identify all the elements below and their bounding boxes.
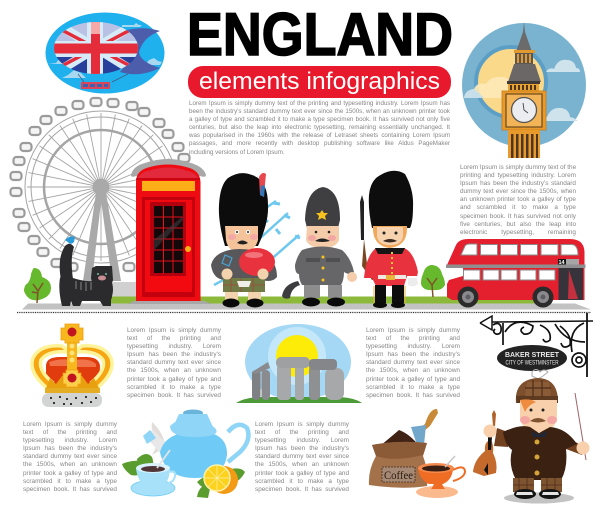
text block: coffee left: standard dummy text ever since	[255, 453, 349, 460]
text block: right of big ben: Lorem Ipsum is simply dummy text of the	[460, 164, 576, 171]
text block: crown: printer took a galley of type and	[127, 376, 221, 383]
capsules	[10, 98, 190, 271]
text block: right of big ben: Ipsum has been the industry's standard	[460, 180, 576, 187]
text block: crown: typesetting industry. Lorem	[127, 343, 221, 350]
icon: teapot and teacup	[122, 410, 248, 498]
text block: stonehenge: specimen book. It has survived	[366, 392, 460, 399]
title: ENGLAND	[187, 1, 453, 68]
text block: tea left: text of the printing and	[23, 429, 117, 436]
text block: right of big ben: electronic typesetting, remaining	[460, 229, 576, 236]
upper windows	[461, 244, 578, 255]
text block: crown: text of the printing and	[127, 335, 221, 342]
text block: tea left: Ipsum has been the industry's	[23, 445, 117, 452]
text block: tea left: specimen book. It has survived	[23, 486, 117, 493]
text block: tea left: typesetting industry. Lorem	[23, 437, 117, 444]
lower windows	[464, 270, 555, 280]
text block: intro paragraph: a galley of type and scrambled it to make a type specimen book. It has survived not only five	[189, 116, 450, 123]
icon: big ben	[462, 22, 586, 158]
text block: right of big ben: printing and typesetting industry. Lorem	[460, 172, 576, 179]
text block: intro paragraph: including versions of Lorem Ipsum.	[189, 149, 285, 156]
text block: crown: Ipsum has been the industry's	[127, 351, 221, 358]
icon: baker street sign	[480, 313, 593, 377]
text block: coffee left: text of the printing and	[255, 429, 349, 436]
text block: crown: scrambled it to make a type	[127, 384, 221, 391]
icon: stonehenge	[236, 324, 362, 403]
icon: baker street sign: BAKER STREET	[505, 350, 559, 359]
text block: right of big ben	[460, 164, 576, 236]
icon: telephone box	[128, 159, 212, 304]
text block: right of big ben: specimen book. It has survived not only	[460, 213, 576, 220]
figure: bagpiper	[211, 173, 300, 308]
subtitle banner: elements infographics	[199, 68, 440, 95]
text block: crown: specimen book. It has survived	[127, 392, 221, 399]
text block: crown: the 1500s, when an unknown	[127, 367, 221, 374]
text block: stonehenge: the 1500s, when an unknown	[366, 367, 460, 374]
text block: stonehenge: printer took a galley of type and	[366, 376, 460, 383]
text block: stonehenge: typesetting industry. Lorem	[366, 343, 460, 350]
text block: coffee left: scrambled it to make a type	[255, 478, 349, 485]
icon: royal crown	[32, 324, 112, 407]
divider	[17, 312, 591, 314]
text block: coffee left: specimen book. It has survived	[255, 486, 349, 493]
text block: coffee left	[255, 421, 349, 493]
text block: stonehenge: text of the printing and	[366, 335, 460, 342]
text block: intro paragraph: passages, and more recently with desktop publishing software like Aldus PageMaker	[189, 140, 450, 147]
text block: stonehenge: standard dummy text ever since	[366, 359, 460, 366]
text block: tea left: printer took a galley of type and	[23, 470, 117, 477]
icon: left tree	[24, 268, 51, 303]
text block: coffee left: Ipsum has been the industry's	[255, 445, 349, 452]
text block: crown: standard dummy text ever since	[127, 359, 221, 366]
icon: double decker bus: 14	[558, 260, 566, 266]
icon: london eye ferris wheel	[10, 98, 190, 300]
text block: tea left	[23, 421, 117, 493]
text block: intro paragraph	[189, 100, 450, 156]
figure: policeman	[282, 187, 357, 306]
wheel rims and spokes	[25, 111, 177, 263]
text block: stonehenge	[366, 327, 460, 399]
text block: crown: Lorem Ipsum is simply dummy	[127, 327, 221, 334]
icon: baker street sign: CITY OF WESTMINSTER	[506, 360, 559, 366]
icon: right tree	[421, 265, 445, 297]
text block: right of big ben: five centuries, but also the leap into	[460, 221, 576, 228]
text block: tea left: standard dummy text ever since	[23, 453, 117, 460]
text block: stonehenge: Lorem Ipsum is simply dummy	[366, 327, 460, 334]
icon: coffee sack and cup: Coffee	[384, 468, 413, 482]
text block: right of big ben: and scrambled it to make a type	[460, 204, 576, 211]
icon: coffee sack and cup	[369, 409, 465, 498]
text block: crown	[127, 327, 221, 399]
text block: coffee left: the 1500s, when an unknown	[255, 461, 349, 468]
text block: intro paragraph: centuries, but also the leap into electronic typesetting, remaining essentially unchanged. It	[189, 124, 450, 131]
text block: intro paragraph: was popularised in the 1960s with the release of Letraset sheets containing Lorem Ipsum	[189, 132, 450, 139]
text block: right of big ben: an unknown printer took a galley of type	[460, 196, 576, 203]
icon: double decker bus	[446, 239, 586, 308]
figure: royal guard	[360, 171, 418, 308]
text block: stonehenge: scrambled it to make a type	[366, 384, 460, 391]
text block: coffee left: typesetting industry. Lorem	[255, 437, 349, 444]
text block: tea left: scrambled it to make a type	[23, 478, 117, 485]
text block: coffee left: Lorem Ipsum is simply dummy	[255, 421, 349, 428]
text block: coffee left: printer took a galley of type and	[255, 470, 349, 477]
icon: bluebird on tail	[65, 236, 75, 244]
text block: intro paragraph: Lorem Ipsum is simply dummy text of the printing and typesetting industry. Lorem Ipsum has	[189, 100, 450, 107]
text block: intro paragraph: been the industry's standard dummy text ever since the 1500s, when an unknown printer took	[189, 108, 450, 115]
icon: airship with union jack	[46, 12, 164, 94]
text block: tea left: Lorem Ipsum is simply dummy	[23, 421, 117, 428]
figure: sherlock with violin	[473, 370, 590, 504]
ground	[22, 296, 591, 310]
icon: black cat	[59, 236, 113, 306]
text block: right of big ben: dummy text ever since the 1500s, when	[460, 188, 576, 195]
text block: stonehenge: Ipsum has been the industry's	[366, 351, 460, 358]
text block: tea left: the 1500s, when an unknown	[23, 461, 117, 468]
